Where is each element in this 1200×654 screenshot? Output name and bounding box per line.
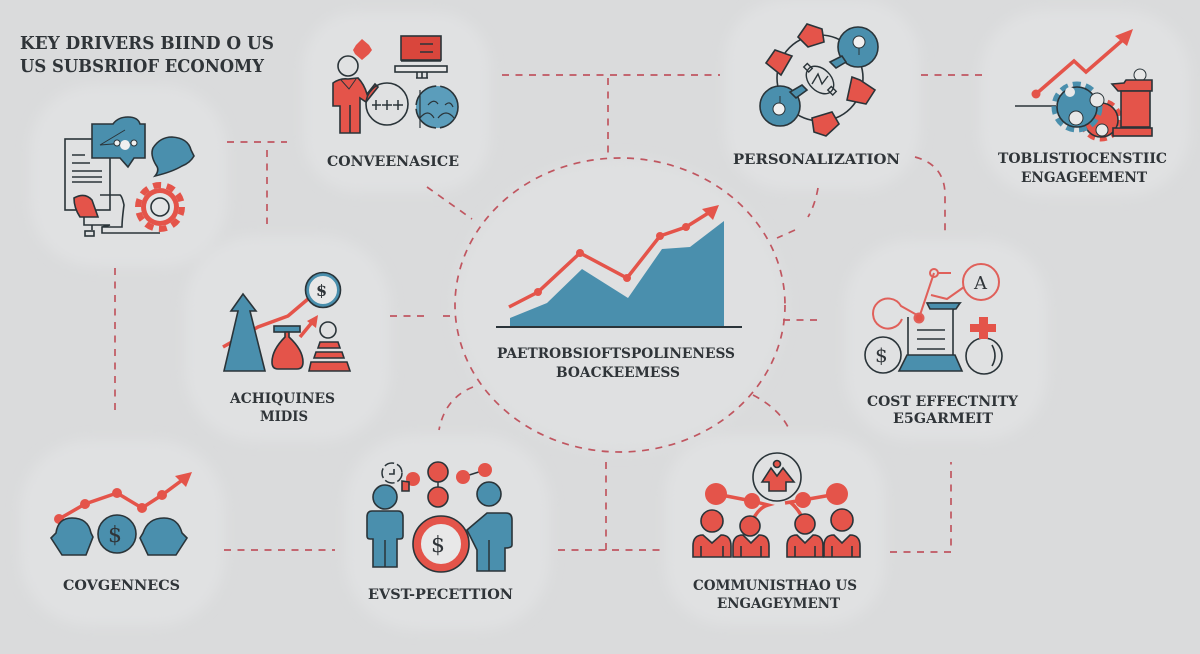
icon: gear <box>138 185 182 229</box>
axis <box>496 326 742 328</box>
icon: network <box>705 483 848 526</box>
icon: blue node bottom <box>760 85 807 126</box>
label: CONVEENASICE <box>327 154 459 170</box>
label <box>867 394 1019 427</box>
label: TOBLISTIOCENSTIIC <box>998 151 1167 167</box>
label: COST EFFECTNITY <box>867 394 1019 410</box>
icon: coin <box>306 272 340 308</box>
dashed connectors <box>115 75 982 552</box>
icon: left person <box>367 485 403 567</box>
label <box>497 346 735 381</box>
label: ENGAGEYMENT <box>717 596 841 612</box>
label: PERSONALIZATION <box>733 152 900 168</box>
panel: documents and feedback <box>65 117 194 236</box>
icon: speech box <box>92 117 145 167</box>
icon: cross flask <box>966 317 1002 374</box>
icon: center symbol <box>801 61 839 99</box>
icon: domes and coin: $ <box>108 523 122 548</box>
icon: trend line <box>223 299 308 347</box>
icon: red nodes <box>428 462 492 507</box>
label: EVST-PECETTION <box>368 587 513 603</box>
icon: dollar coin <box>413 516 469 572</box>
icon: sparkle <box>353 39 372 60</box>
icon: triangle letter: A <box>973 273 988 294</box>
icon: rising arrow <box>1015 29 1133 106</box>
label <box>229 391 335 425</box>
icon: blue node top <box>830 27 878 68</box>
label <box>998 151 1167 186</box>
icon: document flask <box>899 303 962 371</box>
area chart <box>510 221 724 326</box>
icon: presenter <box>333 56 378 133</box>
panel: cost <box>865 264 1019 427</box>
icon: badge <box>753 453 801 501</box>
icon: podium <box>1112 69 1152 136</box>
icon: refresh face <box>416 86 458 128</box>
icon: clock and chat <box>382 463 420 491</box>
icon: red tabs <box>766 24 875 136</box>
label <box>693 578 857 612</box>
icon: people <box>693 509 860 557</box>
panel: convenience <box>327 36 459 170</box>
label: COMMUNISTHAO US <box>693 578 857 594</box>
icon: flask <box>272 326 303 369</box>
label: COVGENNECS <box>63 578 180 594</box>
panel: central chart <box>496 205 742 381</box>
label: ACHIQUINES <box>229 391 335 407</box>
title <box>20 33 274 77</box>
icon: dollar coin: $ <box>431 533 445 558</box>
icon: dollar coin <box>865 337 901 373</box>
panel: personalization <box>733 24 900 168</box>
icon: dollar coin: $ <box>875 343 888 367</box>
icon: coin: $ <box>316 281 327 300</box>
panel: convergence <box>51 472 192 594</box>
trend line <box>509 205 719 307</box>
panel: engagement <box>998 29 1167 186</box>
panel: achiquines <box>223 272 350 425</box>
icon: gears <box>1054 84 1120 139</box>
label: PAETROBSIOFTSPOLINENESS <box>497 346 735 362</box>
icon: stacked pyramid <box>309 322 350 371</box>
icon: right person <box>467 482 512 571</box>
icon: small arrow <box>300 315 318 337</box>
icon: domes and coin <box>51 515 187 555</box>
label: MIDIS <box>260 409 308 425</box>
label: ENGAGEEMENT <box>1021 170 1148 186</box>
icon: monitor <box>395 36 447 78</box>
title: US SUBSRIIOF ECONOMY <box>20 56 265 77</box>
panel: perception <box>367 462 513 603</box>
icon: chair <box>74 195 98 236</box>
icon: trend <box>54 472 192 524</box>
panel: community <box>693 453 860 612</box>
icon: blue arrow <box>224 294 265 371</box>
icon: plus circle <box>366 83 408 125</box>
icon: ring <box>777 35 863 121</box>
label: E5GARMEIT <box>893 411 994 427</box>
icon: chat bubble <box>152 137 194 176</box>
title: KEY DRIVERS BIIND O US <box>20 33 274 54</box>
label: BOACKEEMESS <box>556 365 680 381</box>
icon: red network <box>873 264 999 329</box>
icon: document <box>65 139 160 233</box>
